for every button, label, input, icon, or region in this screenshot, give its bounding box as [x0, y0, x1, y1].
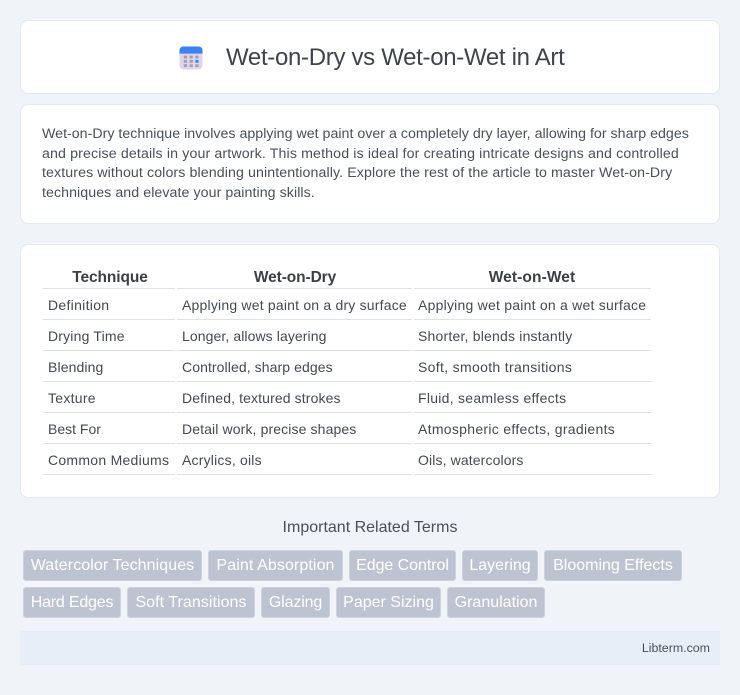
tag: [544, 550, 682, 581]
table row: Common Mediums: Oils, watercolors: [418, 452, 524, 468]
table row: Drying Time: [48, 328, 572, 344]
header card: [20, 20, 720, 94]
footer credit: Libterm.com: [642, 641, 710, 655]
tag: Soft Transitions: [135, 594, 247, 611]
table row: Texture: [48, 390, 566, 406]
tag: [23, 587, 121, 618]
related terms tags: [23, 550, 682, 618]
table row: Common Mediums: Acrylics, oils: [182, 452, 262, 468]
intro text card: [20, 104, 720, 224]
tag: Glazing: [269, 594, 322, 611]
footer bar: [20, 631, 720, 665]
table row: Best For: [48, 421, 615, 437]
intro paragraph: Wet-on-Dry technique involves applying wet paint over a completely dry layer, allowing for sharp edges: [42, 126, 689, 142]
table row: Blending: Controlled, sharp edges: [182, 359, 333, 375]
tag: [336, 587, 441, 618]
intro paragraph: [42, 126, 689, 201]
table row: Texture: Defined, textured strokes: [182, 390, 341, 406]
tag: Granulation: [455, 594, 537, 611]
tag: Paper Sizing: [343, 594, 434, 611]
tag: [349, 550, 456, 581]
tag: [447, 587, 545, 618]
tag: [462, 550, 538, 581]
table row: Definition: [48, 297, 646, 313]
tag: Edge Control: [356, 557, 449, 574]
table header: [72, 269, 575, 286]
table row: Texture: Fluid, seamless effects: [418, 390, 566, 406]
tag: [261, 587, 330, 618]
table row: Blending: Soft, smooth transitions: [418, 359, 572, 375]
intro paragraph: and precise details in your artwork. This method is ideal for creating intricate designs and controlled: [42, 146, 679, 162]
intro paragraph: techniques and elevate your painting skills.: [42, 185, 315, 201]
table row: Definition: Definition: [48, 297, 109, 313]
tag: Layering: [469, 557, 531, 574]
tag: [127, 587, 255, 618]
table row: Best For: Detail work, precise shapes: [182, 421, 356, 437]
tag: Paint Absorption: [216, 557, 335, 574]
intro paragraph: textures without colors blending unintentionally. Explore the rest of the article to master Wet-on-Dry: [42, 165, 672, 181]
table row: Best For: Best For: [48, 421, 101, 437]
table row: Blending: Blending: [48, 359, 103, 375]
table header: Wet-on-Dry: [254, 269, 336, 286]
title: Wet-on-Dry vs Wet-on-Wet in Art: [226, 44, 564, 71]
table row: Best For: Atmospheric effects, gradients: [418, 421, 615, 437]
tag: Blooming Effects: [553, 557, 673, 574]
icon: calendar: [179, 46, 203, 70]
tag: Hard Edges: [31, 594, 113, 611]
table row: Texture: Texture: [48, 390, 96, 406]
comparison table card: [20, 244, 720, 498]
table row: Definition: Applying wet paint on a dry surface: [182, 297, 407, 313]
table row: Definition: Applying wet paint on a wet surface: [418, 297, 646, 313]
related terms heading: Important Related Terms: [283, 519, 457, 536]
table row: Drying Time: Drying Time: [48, 328, 125, 344]
table row: Blending: [48, 359, 572, 375]
table row: Drying Time: Longer, allows layering: [182, 328, 326, 344]
table row: Common Mediums: [48, 452, 524, 468]
tag: [208, 550, 343, 581]
tag: Watercolor Techniques: [31, 557, 194, 574]
table row: Drying Time: Shorter, blends instantly: [418, 328, 572, 344]
table header: Technique: [72, 269, 148, 286]
table row: Common Mediums: Common Mediums: [48, 452, 169, 468]
table header: Wet-on-Wet: [489, 269, 575, 286]
tag: [23, 550, 202, 581]
